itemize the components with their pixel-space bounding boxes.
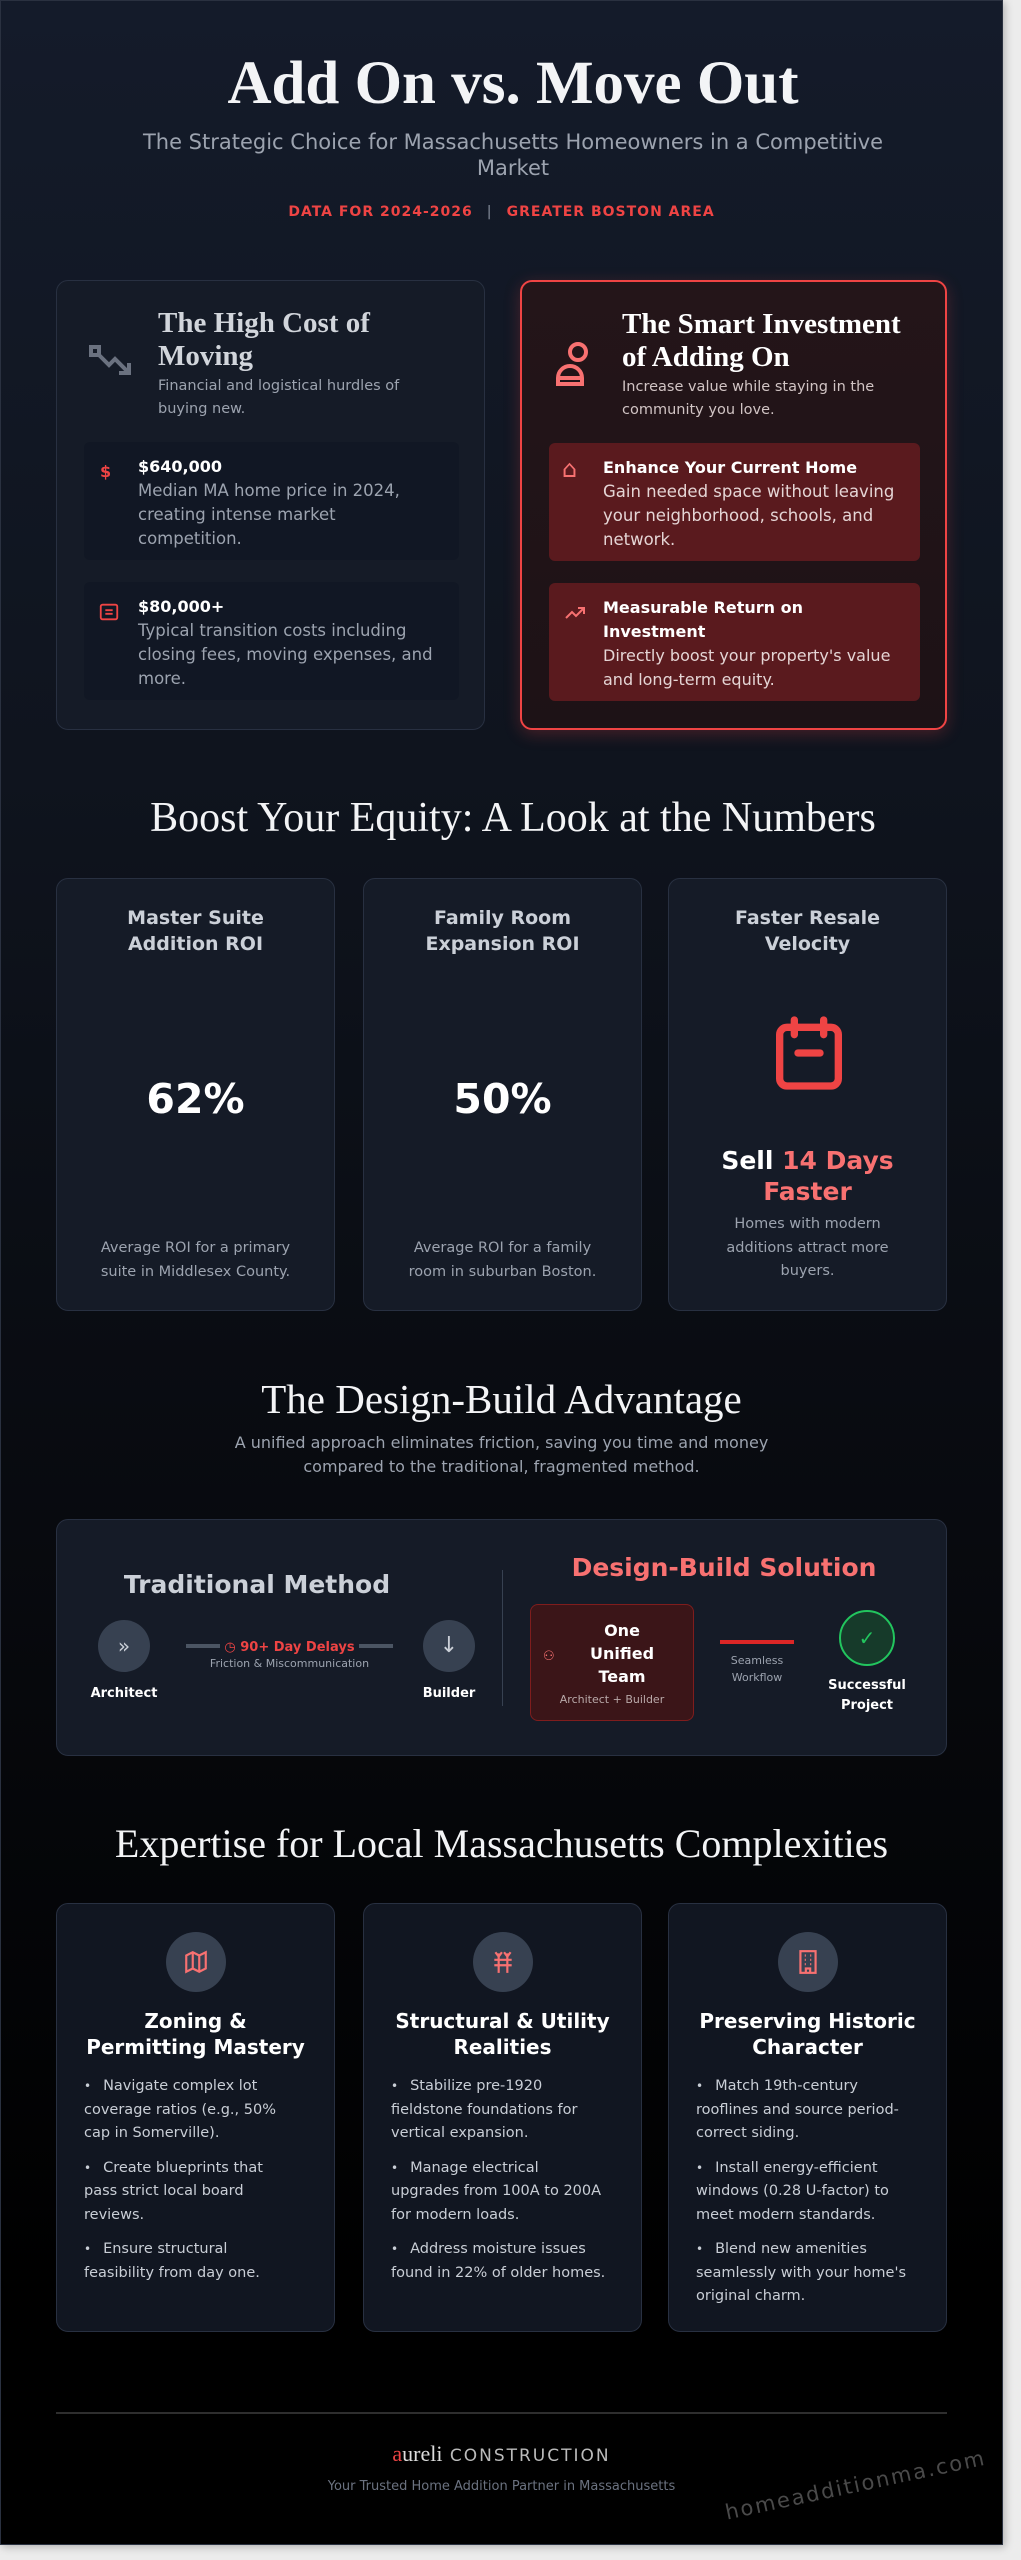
stat text: Faster xyxy=(763,1177,852,1206)
card: structural: Realities xyxy=(453,2035,552,2059)
heading xyxy=(158,307,370,372)
seamless workflow connector: Seamless xyxy=(731,1654,783,1667)
stat card: master suite: Average ROI for a primary suite in Middlesex County. xyxy=(101,1240,290,1280)
item: enhance home: Enhance Your Current Home xyxy=(603,458,857,477)
panel: comparison: Friction & Miscommunication xyxy=(210,1657,369,1670)
sub text: Financial and logistical hurdles of buying new. xyxy=(158,378,399,417)
stat card: resale velocity: Homes with modern additions attract more buyers. xyxy=(726,1216,889,1279)
sub text: Increase value while staying in the community you love. xyxy=(622,379,874,418)
heading: of Adding On xyxy=(622,341,790,373)
icon: building xyxy=(778,1932,838,1992)
title: Add On vs. Move Out xyxy=(227,50,799,117)
card: zoning: Ensure structural feasibility from day one. xyxy=(84,2241,260,2280)
architect node xyxy=(90,1620,158,1701)
stat card: family room: Average ROI for a family room in suburban Boston. xyxy=(409,1240,596,1280)
seamless workflow connector xyxy=(720,1640,794,1684)
item: enhance home: Gain needed space without leaving your neighborhood, schools, and network. xyxy=(603,482,894,549)
heading: The High Cost of xyxy=(158,307,370,339)
builder node: ↓ xyxy=(440,1633,458,1658)
unified team box: Architect + Builder xyxy=(560,1693,664,1706)
panel: comparison xyxy=(56,1519,947,1756)
card: zoning: Zoning & xyxy=(144,2009,247,2033)
heading: Moving xyxy=(158,340,253,372)
builder node xyxy=(423,1620,476,1701)
card: historic: Match 19th-century rooflines and source period-correct siding. xyxy=(696,2078,899,2141)
seamless workflow connector: Workflow xyxy=(732,1671,782,1684)
subtitle: The Strategic Choice for Massachusetts Homeowners in a Competitive Market xyxy=(143,130,883,180)
heading: boost your equity: Boost Your Equity: A Look at the Numbers xyxy=(150,795,876,841)
icon: person xyxy=(556,342,588,386)
stat card: master suite xyxy=(56,878,335,1311)
stat card: master suite: Master Suite xyxy=(127,907,264,929)
subtitle: A unified approach eliminates friction, saving you time and money compared to the traditional, fragmented method. xyxy=(235,1433,768,1476)
card: historic: Preserving Historic xyxy=(699,2009,916,2033)
architect node: » xyxy=(118,1634,130,1658)
icon: map xyxy=(166,1932,226,1992)
item: transition costs: $80,000+ xyxy=(138,597,224,616)
stat card: family room: Family Room xyxy=(434,907,571,929)
card: structural: Stabilize pre-1920 fieldstone foundations for vertical expansion. xyxy=(391,2078,577,2141)
heading: The Smart Investment xyxy=(622,308,901,340)
card: historic: Install energy-efficient windows (0.28 U-factor) to meet modern standards. xyxy=(696,2160,889,2222)
item: price xyxy=(84,442,459,560)
card: historic: Blend new amenities seamlessly with your home's original charm. xyxy=(696,2241,906,2304)
connector: delays xyxy=(186,1644,393,1648)
watermark: homeadditionma.com xyxy=(723,2446,988,2524)
icon: calendar xyxy=(776,1016,842,1090)
card: structural: Address moisture issues found in 22% of older homes. xyxy=(391,2241,605,2280)
builder node: Builder xyxy=(423,1686,475,1701)
item: price: Median MA home price in 2024, creating intense market competition. xyxy=(138,481,400,548)
stat card: family room xyxy=(363,878,642,1311)
item: enhance home xyxy=(549,443,920,561)
stat text xyxy=(721,1146,894,1206)
heading: expertise: Expertise for Local Massachusetts Complexities xyxy=(115,1821,888,1866)
successful project node: Project xyxy=(841,1698,893,1713)
card: zoning xyxy=(56,1903,335,2332)
card: historic: Character xyxy=(752,2035,863,2059)
stat card: resale velocity: Velocity xyxy=(765,933,850,955)
data tag: DATA FOR 2024-2026 | GREATER BOSTON AREA xyxy=(288,204,715,220)
card: structural: Structural & Utility xyxy=(395,2009,610,2033)
unified team box xyxy=(530,1604,694,1721)
panel: smart investment xyxy=(520,280,947,730)
stat number: 62% xyxy=(146,1075,245,1123)
card: zoning: Navigate complex lot coverage ratios (e.g., 50% cap in Somerville). xyxy=(84,2078,276,2141)
architect node: Architect xyxy=(91,1686,157,1701)
stat card: master suite: Addition ROI xyxy=(128,933,263,955)
icon: trending down xyxy=(89,345,131,375)
item: price: $640,000 xyxy=(138,457,222,476)
stat number: 50% xyxy=(453,1075,552,1123)
footer logo: aureli CONSTRUCTION xyxy=(392,2441,611,2466)
card: structural: Manage electrical upgrades from 100A to 200A for modern loads. xyxy=(391,2160,601,2222)
unified team box: One xyxy=(604,1621,640,1640)
traditional heading: Traditional Method xyxy=(124,1570,390,1599)
card: zoning: Permitting Mastery xyxy=(86,2035,305,2059)
panel: high cost of moving xyxy=(56,280,485,730)
design-build heading: Design-Build Solution xyxy=(572,1553,876,1582)
stat text: Sell 14 Days xyxy=(721,1146,894,1175)
item: ROI: Measurable Return on Investment xyxy=(603,598,803,641)
item: enhance home: ⌂ xyxy=(562,455,577,483)
stat card: resale velocity: Faster Resale xyxy=(735,907,880,929)
icon: utility xyxy=(472,1932,532,1992)
successful project node xyxy=(828,1610,906,1713)
item: ROI: Directly boost your property's value and long-term equity. xyxy=(603,646,890,689)
item: transition costs xyxy=(84,582,459,700)
stat card: resale velocity xyxy=(668,878,947,1311)
unified team box: Unified xyxy=(590,1644,654,1663)
heading xyxy=(622,308,901,373)
card: zoning: Create blueprints that pass strict local board reviews. xyxy=(84,2160,263,2222)
stat card: family room: Expansion ROI xyxy=(425,933,580,955)
heading: design-build advantage: The Design-Build Advantage xyxy=(261,1376,742,1422)
panel: comparison: ◷ 90+ Day Delays xyxy=(224,1640,355,1655)
item: ROI xyxy=(549,583,920,701)
footer tagline: Your Trusted Home Addition Partner in Massachusetts xyxy=(328,2479,675,2494)
card: structural xyxy=(363,1903,642,2332)
successful project node: Successful xyxy=(828,1678,906,1693)
item: transition costs: Typical transition costs including closing fees, moving expenses, and more. xyxy=(138,621,433,688)
card: historic xyxy=(668,1903,947,2332)
successful project node: ✓ xyxy=(859,1626,875,1650)
item: price: $ xyxy=(100,462,111,481)
unified team box: ⚇ xyxy=(543,1649,555,1664)
unified team box: Team xyxy=(598,1667,646,1686)
